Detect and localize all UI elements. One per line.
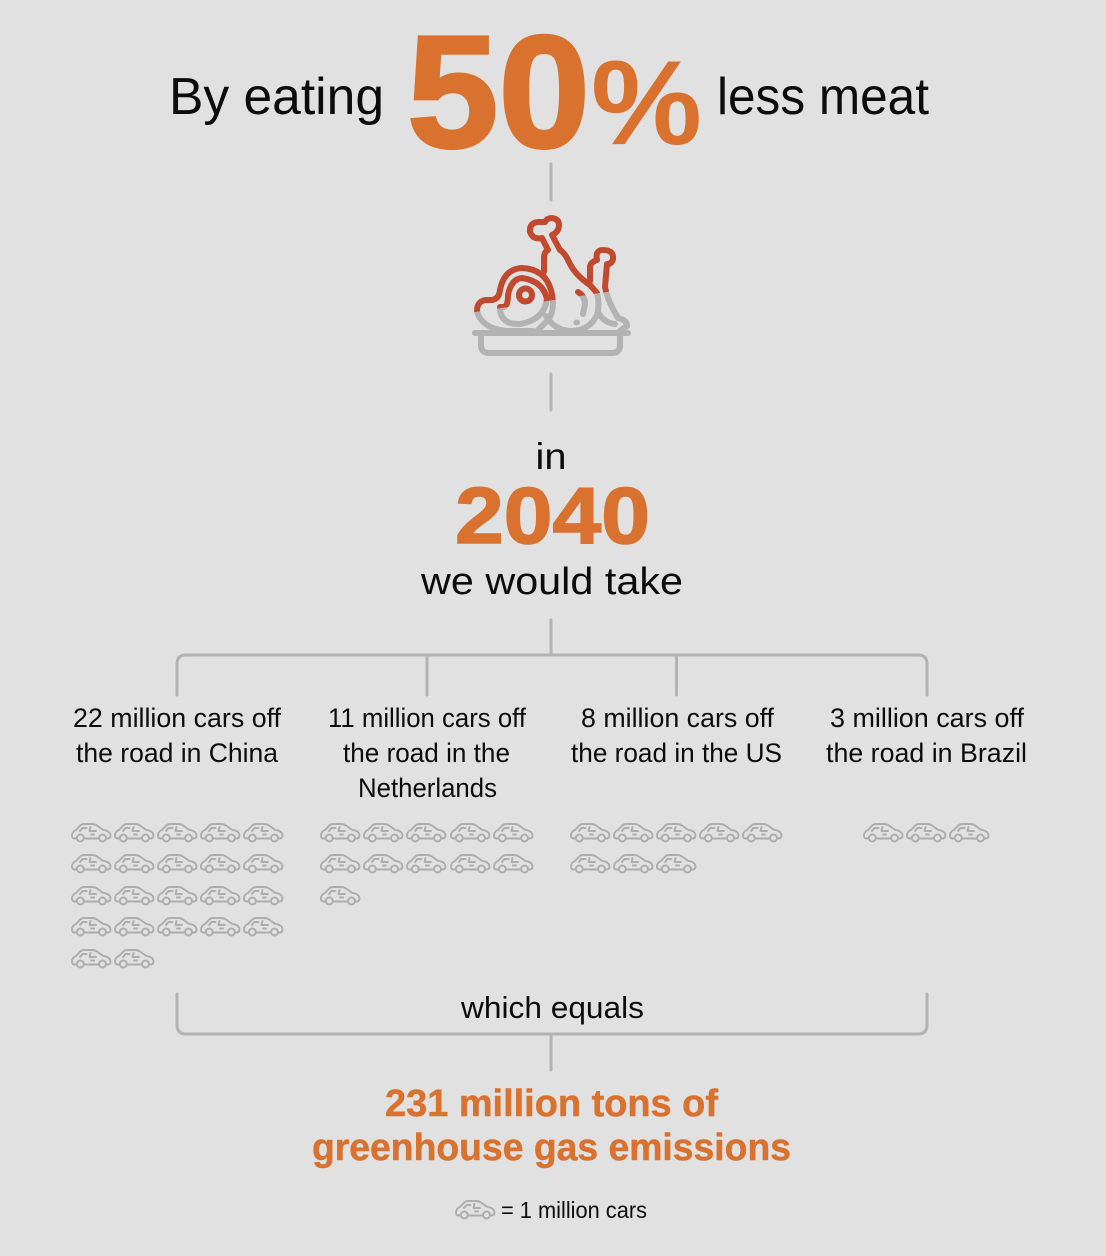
text: Netherlands label: the road in the [343,738,510,768]
text: China label: the road in China [76,738,279,768]
icon: roast meat on a tray [475,218,628,353]
text: Netherlands label [328,703,526,803]
heading: in 2040 we would take: we would take [420,561,683,603]
title: % [591,36,702,170]
connector: bracket joining the countries [177,994,927,1070]
heading: in 2040 we would take [420,436,683,603]
panel: China [72,703,282,968]
panel: Netherlands [321,703,532,904]
text: Netherlands label: 11 million cars off [328,703,526,733]
title [169,2,930,181]
title: less meat [717,68,930,126]
text: Brazil label: the road in Brazil [826,738,1027,768]
text: US label: 8 million cars off [581,703,774,733]
panel: US [571,703,782,872]
panel: Brazil [826,703,1027,842]
result: 231 million tons of greenhouse gas emissions [312,1083,791,1169]
icons: 8 cars [571,824,782,872]
connector: branches to four countries [177,620,927,695]
text: Brazil label [826,703,1027,768]
text: China label: 22 million cars off [73,703,281,733]
legend: one car icon equals 1 million cars: = 1 million cars [501,1197,647,1223]
icons: 11 cars [321,824,532,904]
result: 231 million tons of greenhouse gas emissions: greenhouse gas emissions [312,1127,791,1169]
text: Brazil label: 3 million cars off [830,703,1024,733]
text: China label [73,703,281,768]
icons: 22 cars [72,824,282,968]
text: Netherlands label: Netherlands [358,773,497,803]
text: which equals: which equals [460,990,644,1025]
heading: in 2040 we would take: 2040 [455,471,650,560]
result: 231 million tons of greenhouse gas emissions: 231 million tons of [385,1083,718,1125]
text: US label: the road in the US [571,738,782,768]
heading: in 2040 we would take: in [536,436,566,477]
text: US label [571,703,782,768]
title: 50 [407,2,590,181]
icons: 3 cars [864,824,988,842]
title: By eating [169,68,384,126]
